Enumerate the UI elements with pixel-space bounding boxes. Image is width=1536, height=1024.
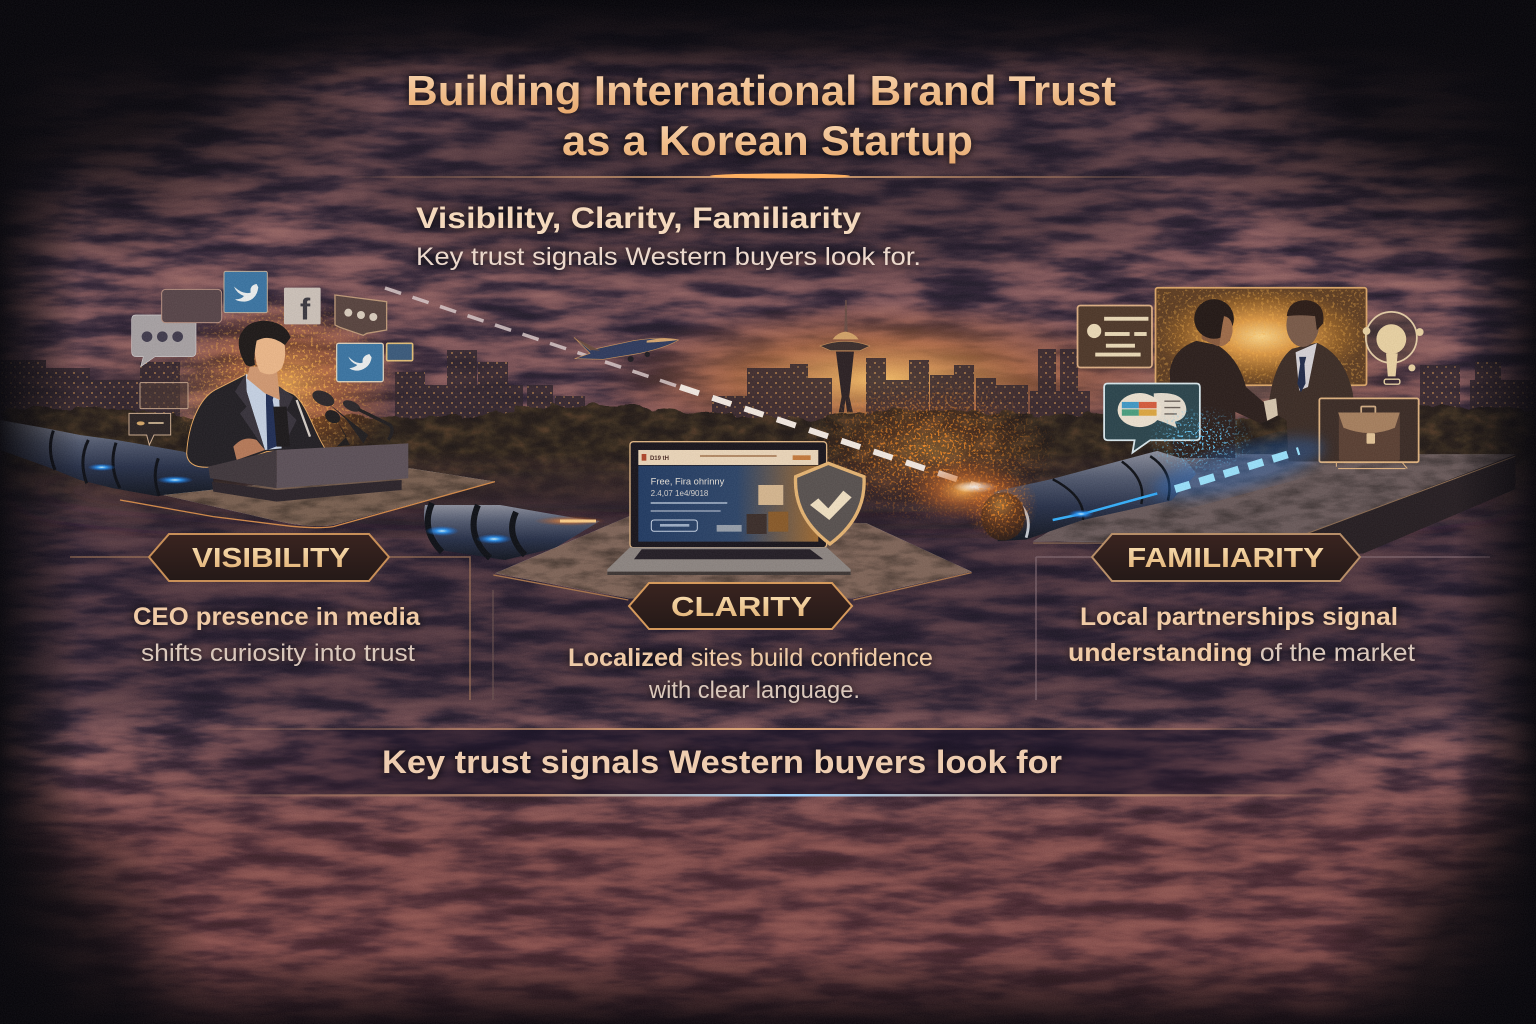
platform <box>120 468 495 528</box>
laptop: D19 tH <box>650 456 669 462</box>
icon: twitter top <box>224 271 267 313</box>
title <box>406 67 1116 164</box>
chat card <box>1104 383 1200 453</box>
title: Building International Brand Trust <box>406 67 1116 114</box>
icon: facebook: f <box>300 292 311 326</box>
icon: small tablet <box>387 343 413 361</box>
badge: clarity <box>629 583 852 629</box>
text: familiarity description: understanding of the market <box>1068 639 1415 667</box>
man left <box>1170 299 1276 458</box>
speaker glow <box>160 290 400 477</box>
icon: shield <box>795 463 864 544</box>
icon: small frames <box>129 383 188 445</box>
text: familiarity description <box>1068 603 1415 667</box>
text: clarity description <box>568 644 933 704</box>
dashed flight path arrow <box>385 288 980 487</box>
panel: familiarity illustration <box>981 288 1515 554</box>
icon: pipe middle <box>424 503 606 560</box>
subheading: Visibility, Clarity, Familiarity <box>416 202 861 235</box>
text: visibility description <box>133 603 421 667</box>
platform <box>493 517 972 600</box>
panel: visibility illustration <box>0 271 495 528</box>
man right <box>1264 300 1353 461</box>
badge: visibility: VISIBILITY <box>192 542 350 573</box>
laptop: 2.4,07 1e4/9018 <box>651 489 709 498</box>
impact glow and sparks <box>905 460 1025 520</box>
icon: card behind <box>162 289 222 323</box>
laptop: Free, Fira ohrinny <box>651 477 725 487</box>
icon: facebook <box>284 288 321 326</box>
icon: podium <box>208 443 408 502</box>
icon: pipe left <box>0 420 213 496</box>
blue sparks <box>1145 405 1255 475</box>
panel: clarity illustration <box>493 442 972 600</box>
icon: speaker <box>187 321 325 467</box>
partners frame <box>1156 288 1367 385</box>
pipe right <box>981 451 1196 541</box>
bottom banner: Key trust signals Western buyers look for <box>382 744 1062 780</box>
text: visibility description: CEO presence in media <box>133 603 421 631</box>
subheading <box>416 202 921 271</box>
icon: chat bubble grey <box>132 315 196 367</box>
laptop <box>607 442 851 575</box>
text: familiarity description: Local partnerships signal <box>1080 603 1398 631</box>
title: as a Korean Startup <box>562 117 973 164</box>
text: clarity description: with clear language. <box>648 677 860 704</box>
card left <box>1078 305 1152 368</box>
city skyline <box>0 300 1536 490</box>
section frame lines <box>70 557 1490 700</box>
subheading: Key trust signals Western buyers look for. <box>416 243 921 271</box>
bottom banner <box>180 728 1360 796</box>
icon: lightbulb badge <box>1363 312 1424 384</box>
icon: chat bubble brown <box>335 295 387 335</box>
orange burst at right pipe <box>962 469 1038 541</box>
briefcase card <box>1319 398 1419 469</box>
blue dashed line <box>1148 425 1330 512</box>
icon: twitter lower <box>337 343 383 382</box>
icon: airplane <box>574 337 679 362</box>
text: visibility description: shifts curiosity into trust <box>141 640 415 667</box>
badge: familiarity: FAMILIARITY <box>1127 542 1324 573</box>
text: clarity description: Localized sites build confidence <box>568 644 933 672</box>
Space Needle tower <box>820 300 870 452</box>
badge: familiarity <box>1092 534 1360 581</box>
title divider <box>335 174 1205 178</box>
tree band <box>0 375 1536 530</box>
platform <box>1033 454 1515 554</box>
badge: clarity: CLARITY <box>671 591 812 622</box>
badge: visibility <box>149 534 389 581</box>
icon: microphones <box>273 387 392 447</box>
